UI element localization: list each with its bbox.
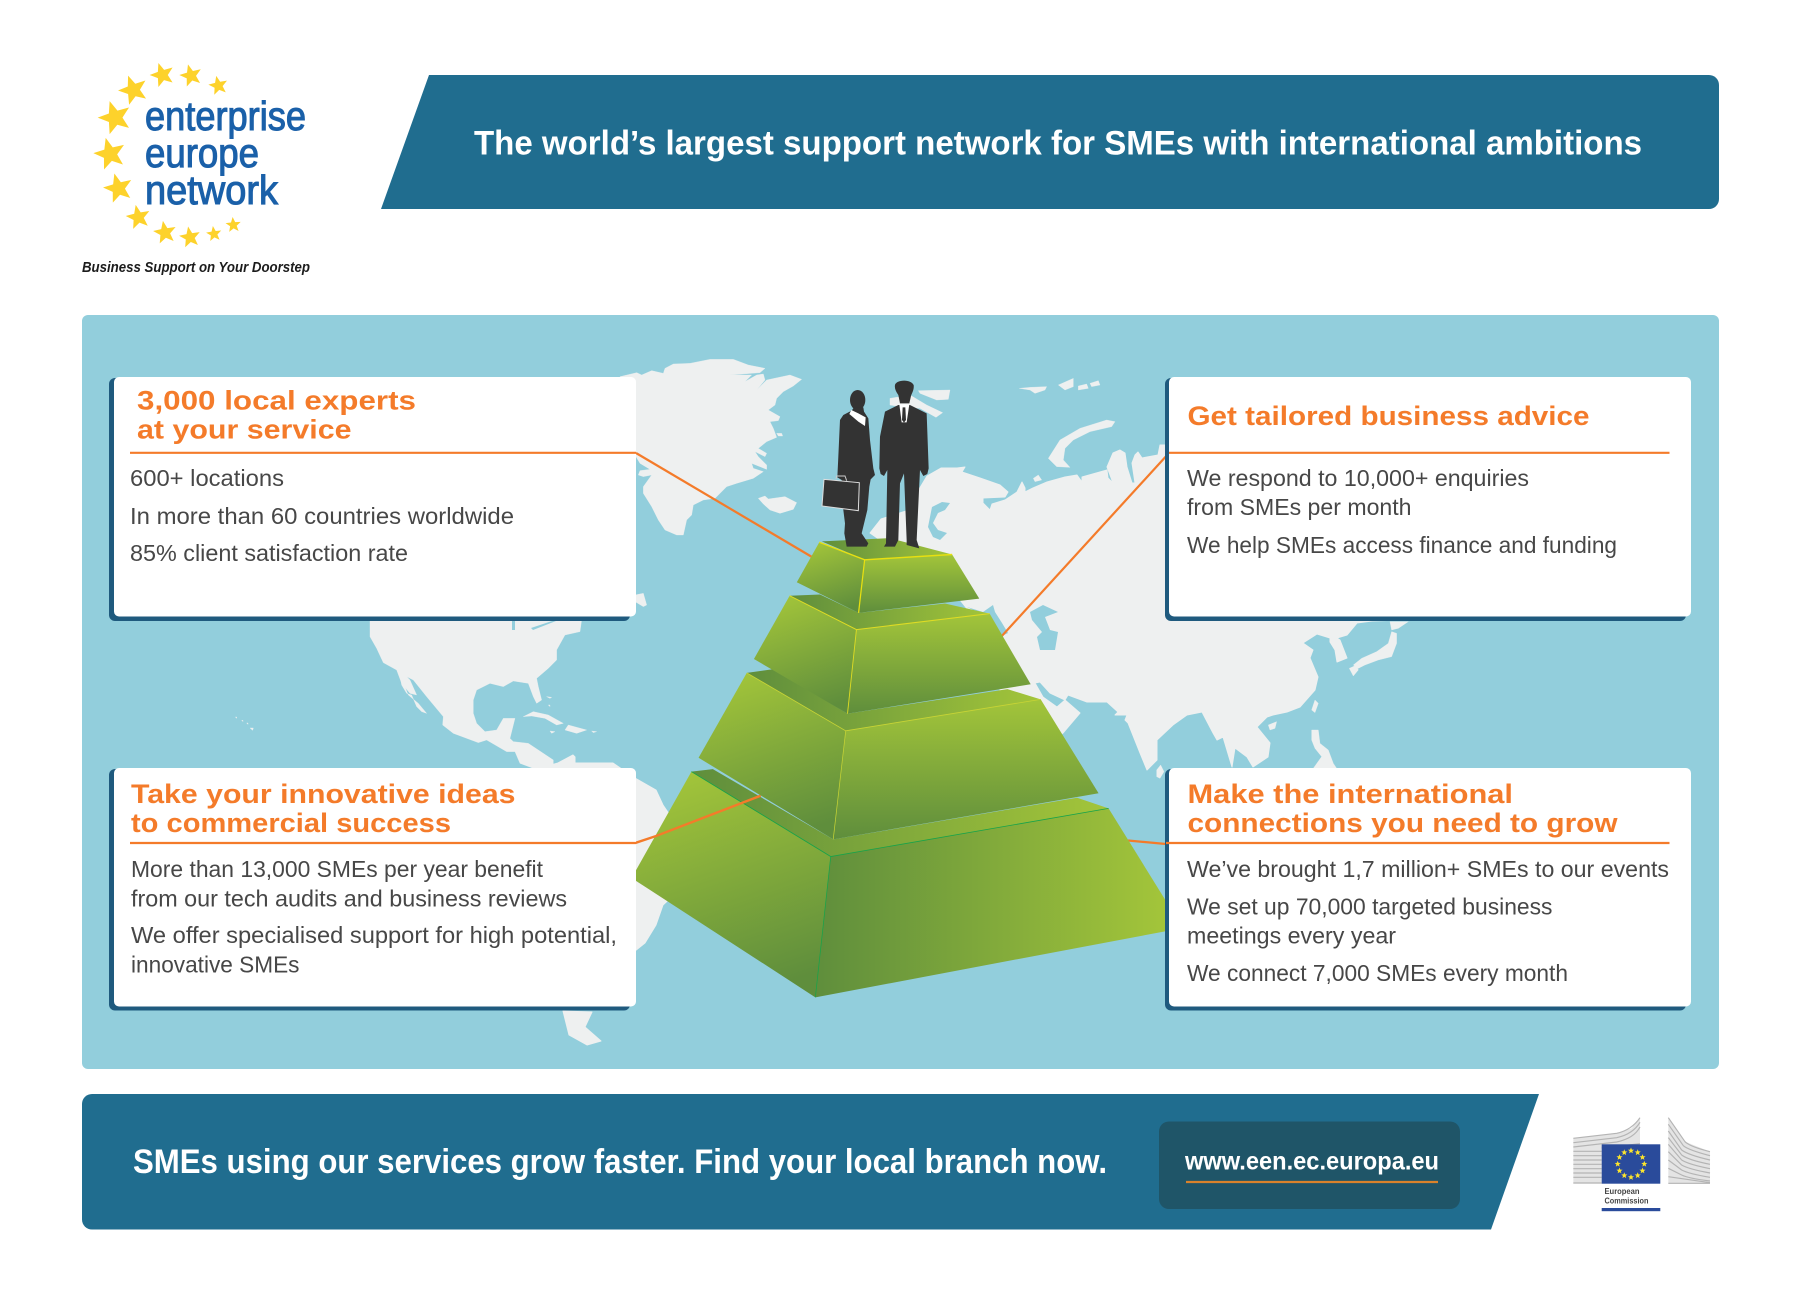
Commission building [1573, 1118, 1710, 1184]
card heading: Take your innovative ideas [131, 779, 516, 809]
website button: www.een.ec.europa.eu [1184, 1148, 1439, 1176]
card body text [131, 856, 617, 978]
header banner [381, 75, 1719, 209]
card heading [137, 386, 416, 444]
Commission wordmark [1604, 1186, 1648, 1206]
Eurasia [870, 445, 1400, 780]
card: tailored business advice [1165, 377, 1691, 621]
card body text: We respond to 10,000+ enquiries [1187, 465, 1529, 491]
card body text: We offer specialised support for high potential, [131, 922, 617, 948]
logo: enterprise europe network [82, 59, 310, 276]
businesswoman [837, 390, 875, 547]
logo wordmark: enterprise [145, 93, 306, 139]
Japan and east Asian islands [1157, 622, 1408, 778]
pyramid tier 4 (base) [635, 769, 1166, 997]
card body text: innovative SMEs [131, 952, 300, 978]
card heading: 3,000 local experts [137, 386, 416, 416]
pyramid [635, 538, 1166, 997]
card heading: Make the international [1188, 779, 1513, 809]
briefcase [822, 476, 859, 511]
inland waters [512, 502, 1058, 650]
card: innovative ideas [109, 768, 636, 1010]
card body text: We help SMEs access finance and funding [1187, 532, 1617, 558]
South America [540, 755, 690, 955]
card heading: Get tailored business advice [1188, 401, 1590, 431]
card body text: from our tech audits and business reviews [131, 886, 567, 912]
businessman [879, 381, 929, 548]
card: international connections [1165, 768, 1691, 1010]
footer banner [82, 1094, 1539, 1230]
card body text: More than 13,000 SMEs per year benefit [131, 856, 543, 882]
card heading: at your service [137, 414, 352, 444]
card body text [1187, 465, 1617, 558]
logo stars [90, 59, 241, 248]
card body text: 85% client satisfaction rate [130, 540, 408, 566]
pyramid tier 3 [699, 669, 1099, 839]
North America, Caribbean [235, 620, 597, 773]
card body text: 600+ locations [130, 465, 284, 491]
logo wordmark: network [145, 167, 278, 213]
card body text: We connect 7,000 SMEs every month [1187, 960, 1568, 986]
card heading: connections you need to grow [1188, 808, 1619, 838]
card body text [1187, 856, 1669, 986]
pyramid tier 2 [754, 594, 1031, 714]
logo wordmark [145, 93, 306, 213]
logo wordmark: europe [145, 130, 259, 176]
pyramid tier 1 (top) [797, 538, 979, 613]
title: The world’s largest support network for SMEs with international ambitions [474, 124, 1642, 162]
footer text: SMEs using our services grow faster. Find your local branch now. [133, 1143, 1107, 1181]
EU flag [1602, 1144, 1660, 1184]
card heading: to commercial success [131, 808, 451, 838]
Greenland and north-east Canada [620, 359, 802, 607]
tagline: Business Support on Your Doorstep [82, 260, 310, 276]
website button [1159, 1122, 1460, 1209]
card body text: We’ve brought 1,7 million+ SMEs to our events [1187, 856, 1669, 882]
business people silhouettes [822, 381, 929, 548]
card body text: In more than 60 countries worldwide [130, 503, 514, 529]
card heading [131, 779, 516, 838]
connector line: innovative ideas [635, 796, 761, 843]
card heading [1188, 779, 1619, 838]
card: 3,000 local experts [109, 377, 636, 621]
Commission wordmark: Commission [1604, 1196, 1648, 1206]
panel: world map background [82, 315, 1719, 1069]
connector lines behind the pyramid [636, 453, 1169, 844]
card body text: We set up 70,000 targeted business [1187, 894, 1552, 920]
card body text [130, 465, 514, 566]
European Commission logo [1573, 1118, 1710, 1211]
world map [235, 359, 1408, 1045]
Commission wordmark: European [1604, 1186, 1640, 1196]
Svalbard [890, 390, 950, 417]
Arctic islands [1019, 378, 1115, 482]
card body text: from SMEs per month [1187, 494, 1412, 520]
card body text: meetings every year [1187, 922, 1396, 948]
